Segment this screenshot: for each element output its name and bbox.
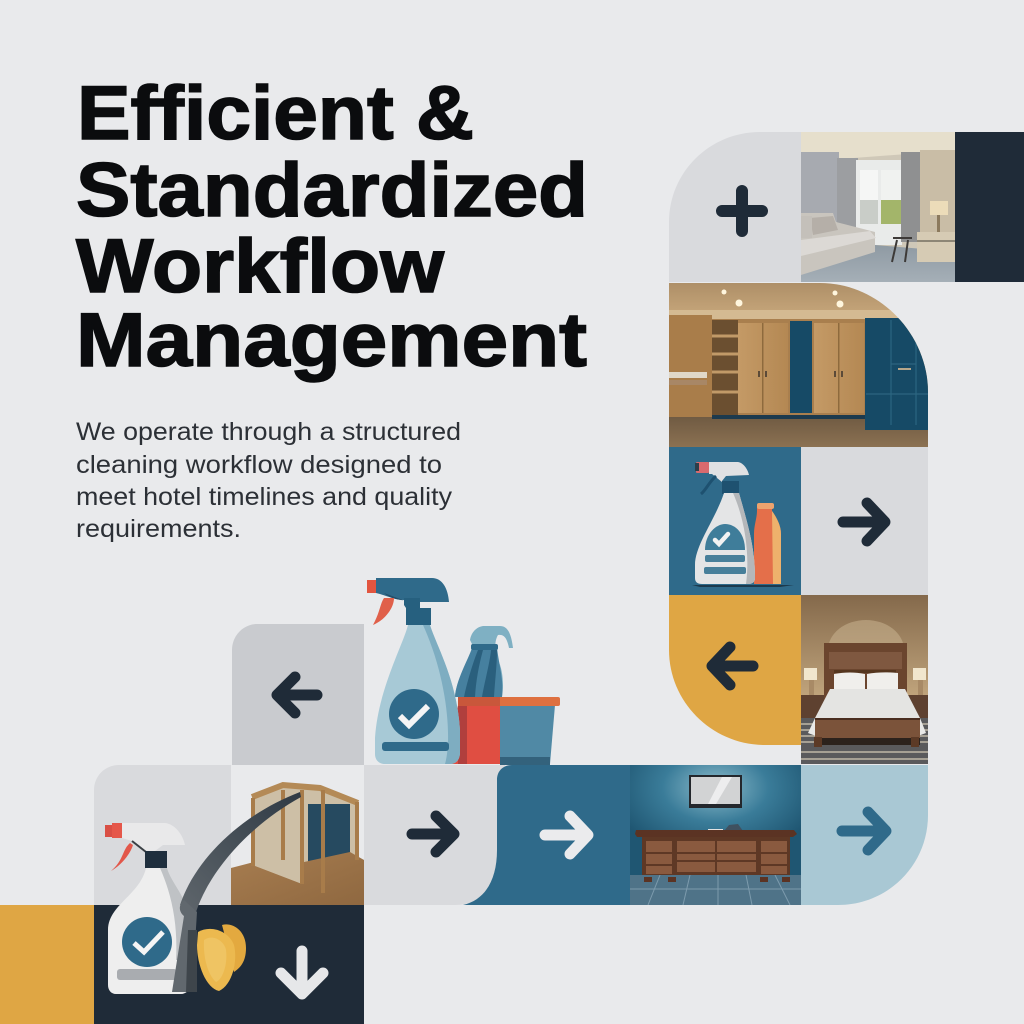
icon: right arrow [843,503,885,541]
description text: requirements. [76,515,241,543]
illustration: bucket and second bottle [450,626,560,765]
icon: plus [722,191,762,231]
room sofa [801,213,876,275]
panel: blue tile with right arrow [463,765,631,905]
vacuum hose [180,792,301,912]
panel: dresser photo [630,765,801,905]
panel: light blue tile with right arrow [801,765,928,905]
panel: grey tile with left arrow [232,624,364,765]
description text: meet hotel timelines and quality [76,483,453,511]
icon: right arrow [412,816,454,852]
panel: navy tile [955,132,1024,282]
title: Efficient & [77,71,474,156]
icon: right arrow [545,816,588,854]
panel: hallway photo [231,782,364,905]
illustration: white spray bottle with vacuum and gloves [105,792,301,994]
icon: red bottle [754,503,781,584]
white spray bottle [105,825,115,837]
bed lamps [804,668,926,695]
panel: wardrobe photo [669,283,935,447]
panel: blue tile with cleaning bottles [669,447,801,595]
panel: bed photo [801,595,928,764]
yellow gloves [222,924,246,972]
panel: bottom-left grey tile [94,765,231,905]
icon: right arrow [842,812,886,850]
icon: down arrow [281,951,323,994]
title [76,71,588,383]
title: Management [76,298,587,383]
description text: We operate through a structured [76,418,461,446]
panel: grey tile with right arrow [364,765,505,905]
panel: yellow tile with left arrow [669,595,801,745]
panel: hotel room photo [801,132,960,282]
dresser television [689,775,742,808]
description text: cleaning workflow designed to [76,451,442,479]
panel: grey tile with right arrow [801,447,928,595]
description text [76,418,461,543]
title: Standardized [76,148,588,233]
wardrobe ceiling lights [722,290,844,308]
title: Workflow [76,224,445,309]
panel: navy tile with down arrow [94,905,364,1024]
icon: white spray bottle [695,462,755,584]
panel: plus tile [669,132,801,282]
panel: yellow corner tile [0,905,94,1024]
icon: left arrow [277,677,317,713]
illustration: large spray bottle with check [367,578,460,764]
icon: left arrow [712,647,753,685]
